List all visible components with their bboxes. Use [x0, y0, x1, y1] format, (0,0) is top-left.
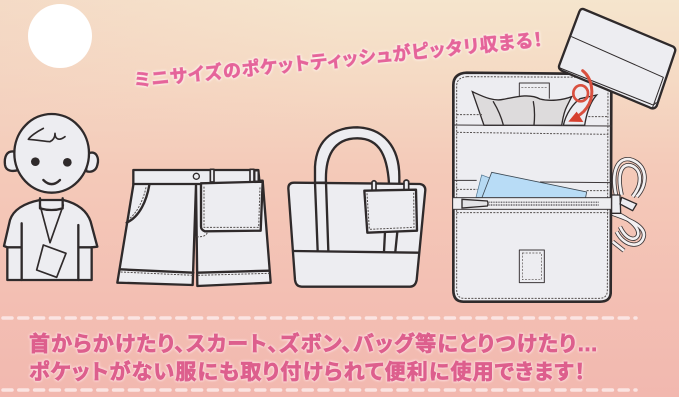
packet inner edge — [560, 37, 663, 107]
wallet body — [453, 73, 611, 302]
cord clasp — [610, 195, 637, 213]
lower stitching — [457, 211, 608, 214]
belt loops — [210, 169, 258, 182]
button — [193, 173, 199, 179]
illustration: open wallet — [453, 9, 675, 302]
ears — [5, 151, 98, 172]
tissue — [472, 92, 572, 125]
middle pocket lines — [453, 180, 611, 183]
zipper band — [453, 198, 611, 209]
tab — [519, 83, 549, 99]
pouch — [201, 182, 263, 231]
handle — [315, 127, 399, 190]
tab stitching — [521, 86, 547, 88]
neck — [40, 198, 63, 210]
hems — [120, 269, 269, 273]
lanyard — [40, 205, 63, 243]
text line two: ポケットがない服にも取り付けられて便利に使用できます！ — [29, 360, 585, 384]
waistband — [133, 180, 200, 187]
pouch stitching — [204, 187, 260, 227]
sleeve lines — [7, 223, 92, 280]
hair — [28, 128, 65, 142]
id card — [37, 245, 66, 277]
zipper centre — [463, 202, 599, 205]
lower patch — [519, 250, 544, 283]
zipper teeth — [463, 197, 599, 210]
attached pouch — [364, 190, 417, 233]
middle stitching — [457, 189, 608, 191]
heading: ミニサイズのポケットティッシュがピッタリ収まる！ — [133, 29, 543, 91]
bottom text block — [29, 332, 598, 384]
background tint — [0, 0, 679, 150]
dashed border bottom — [3, 388, 636, 392]
zipper pull — [462, 199, 488, 208]
shorts outline — [117, 170, 271, 286]
packet slip — [563, 95, 597, 125]
neck cord — [612, 159, 645, 251]
pocket edge — [453, 123, 611, 127]
neck cord highlight — [612, 159, 645, 251]
blue cards — [476, 175, 495, 198]
arrow head — [568, 112, 583, 122]
tissue folds — [493, 102, 535, 125]
pouch stitching — [367, 192, 414, 229]
hem stitching — [121, 272, 269, 275]
eyes — [31, 157, 72, 167]
body — [4, 200, 97, 280]
head — [14, 114, 89, 193]
upper pocket stitch — [457, 115, 608, 117]
pocket stitching — [457, 132, 608, 134]
illustration: tote bag with pouch — [288, 127, 425, 287]
text line one: 首からかけたり、スカート、ズボン、バッグ等にとりつけたり… — [29, 332, 598, 356]
lower patch stitching — [522, 253, 541, 280]
illustration: person with lanyard — [4, 114, 98, 280]
clips — [372, 180, 409, 191]
arrow curve — [577, 71, 592, 117]
back pocket stitch — [197, 233, 207, 237]
mouth — [43, 180, 60, 184]
dashed border top — [3, 316, 636, 320]
arrow ring — [573, 85, 588, 101]
blue card front — [482, 172, 587, 199]
white circle — [28, 4, 92, 68]
tissue packet — [559, 9, 675, 108]
outer stitching — [457, 77, 608, 298]
red arrow — [568, 71, 592, 122]
straps — [315, 183, 397, 252]
pocket stitching — [129, 187, 146, 219]
illustration: shorts with pouch — [117, 169, 271, 286]
side pocket — [127, 185, 149, 223]
bag base line — [294, 251, 418, 253]
bag body — [288, 183, 425, 287]
